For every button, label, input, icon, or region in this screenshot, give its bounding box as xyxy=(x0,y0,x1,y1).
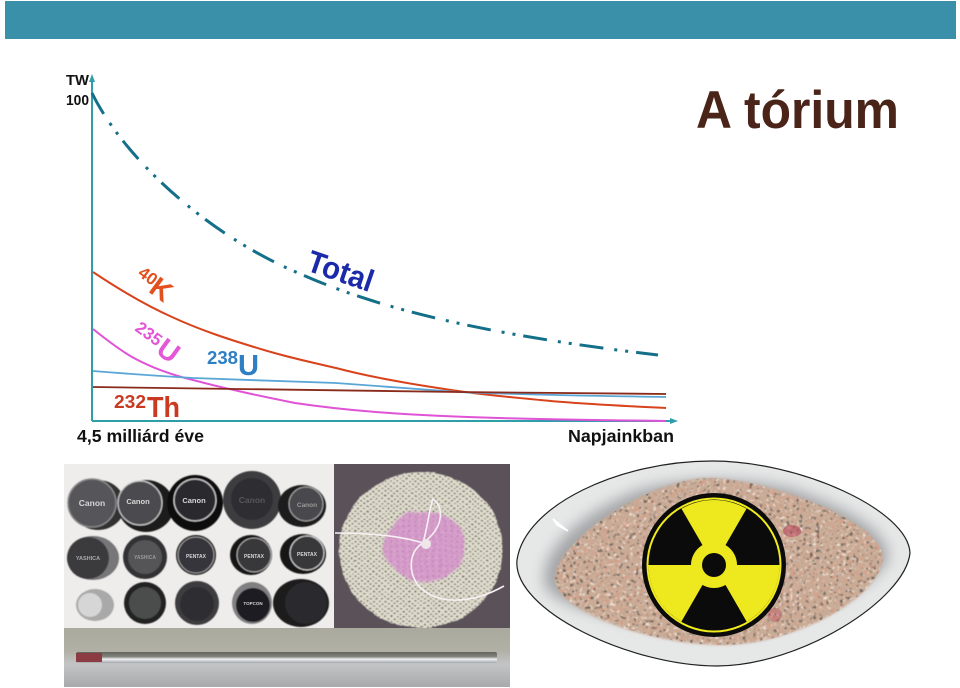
curve: 232Th xyxy=(93,387,666,394)
curve: 238U xyxy=(93,371,666,397)
mantle string xyxy=(335,499,504,600)
y axis xyxy=(89,74,95,421)
sand pile xyxy=(555,478,883,645)
lens cap lettering xyxy=(76,495,318,606)
lens cap lettering: YASHICA xyxy=(134,555,156,561)
red tip xyxy=(76,653,102,662)
x axis start label: 4,5 milliárd éve xyxy=(77,426,204,446)
label: 232Th xyxy=(114,392,180,424)
lens row 3 xyxy=(76,579,329,627)
y axis value: 100: 100 xyxy=(66,92,89,109)
label: 40K xyxy=(129,260,179,308)
title: A tórium xyxy=(696,81,899,140)
mantle mesh xyxy=(339,472,503,628)
chart: radiogenic heat over time xyxy=(66,72,678,446)
radiation symbol xyxy=(642,493,786,637)
curve: 235U xyxy=(93,329,666,421)
label: Total: Total xyxy=(303,244,378,299)
lens cap lettering: PENTAX xyxy=(297,552,318,558)
curve: 40K xyxy=(93,272,666,408)
lens cap lettering: Canon xyxy=(297,502,317,509)
photo: lens collection xyxy=(64,464,334,628)
label: 232Th: Th xyxy=(147,392,180,424)
label: 235U: U xyxy=(151,332,186,369)
lens cap lettering: Canon xyxy=(126,497,150,506)
curve: Total xyxy=(92,93,658,355)
photo: thorium gas mantle xyxy=(334,464,510,628)
label: 238U xyxy=(207,348,259,382)
dish xyxy=(517,461,910,666)
photo: thoriated welding rod xyxy=(64,628,510,687)
lens row 2 xyxy=(67,534,326,580)
label: 235U xyxy=(127,315,186,369)
dish shadow xyxy=(544,480,888,630)
sand grains xyxy=(550,475,890,650)
label: 238U: U xyxy=(238,350,259,382)
lens cap lettering: PENTAX xyxy=(244,554,265,560)
pink centre xyxy=(384,511,466,581)
label: 235U: 235 xyxy=(132,318,166,350)
label: 40K: 40 xyxy=(135,263,161,289)
rod xyxy=(76,652,497,663)
x axis end label: Napjainkban xyxy=(568,426,674,446)
photo: monazite sand dish xyxy=(517,461,910,666)
lens cap lettering: TOPCON xyxy=(243,601,263,606)
lens cap lettering: YASHICA xyxy=(76,556,100,562)
label: 232Th: 232 xyxy=(114,392,146,412)
y axis label: TW: TW xyxy=(66,72,90,89)
lens cap lettering: PENTAX xyxy=(186,554,207,560)
lens row 1 xyxy=(68,471,326,532)
lens cap lettering: Canon xyxy=(182,496,206,505)
header bar xyxy=(5,1,956,39)
lens cap lettering: Canon xyxy=(239,495,265,505)
x axis xyxy=(92,418,678,424)
lens cap lettering: Canon xyxy=(79,498,105,508)
label: 40K: K xyxy=(144,271,179,308)
dish highlight xyxy=(553,519,568,531)
label: 238U: 238 xyxy=(207,348,238,368)
